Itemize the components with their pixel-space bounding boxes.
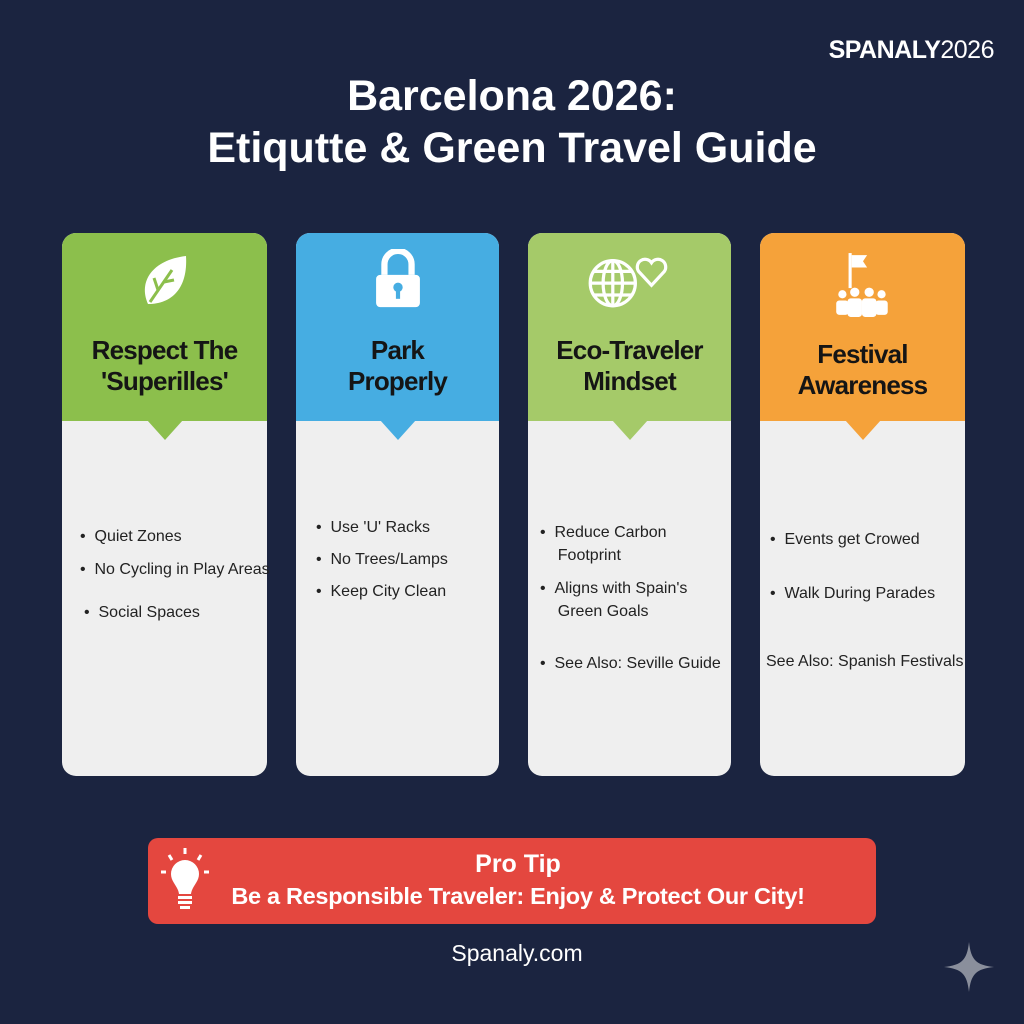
header text: Mindset	[583, 366, 676, 396]
footer: website: Spanaly.com	[451, 940, 583, 966]
icon: leaf	[144, 256, 186, 304]
panel: eco-traveler mindset: • Reduce Carbon	[540, 524, 667, 541]
icon: globe and heart	[588, 258, 668, 308]
header text: Respect The	[92, 335, 237, 365]
panel: eco-traveler mindset: • See Also: Seville Guide	[540, 655, 721, 672]
brand logo: SPANALY2026	[829, 36, 994, 64]
panel: festival awareness: • Walk During Parades	[770, 585, 935, 602]
callout text: Be a Responsible Traveler: Enjoy & Protect Our City!	[231, 883, 805, 909]
callout: pro tip	[148, 838, 876, 924]
panel: park properly	[296, 233, 499, 776]
icon: crowd with flag	[836, 253, 888, 317]
header text	[556, 335, 704, 396]
panel: park properly: • Use 'U' Racks	[316, 519, 430, 536]
icon: sparkle	[944, 942, 994, 992]
panel: park properly: • No Trees/Lamps	[316, 551, 448, 568]
panel: festival awareness: • Events get Crowed	[770, 531, 920, 548]
bullets	[80, 528, 270, 621]
panel: eco-traveler mindset: Green Goals	[558, 603, 648, 620]
callout text	[231, 850, 805, 909]
panel: eco-traveler mindset: • Aligns with Spain's	[540, 580, 687, 597]
panel: respect the superilles: • Social Spaces	[84, 604, 200, 621]
panel: eco-traveler mindset: Footprint	[558, 547, 621, 564]
title	[207, 72, 817, 172]
panel: park properly: • Keep City Clean	[316, 583, 446, 600]
bullets	[766, 531, 963, 670]
icon: light bulb	[161, 848, 209, 909]
panel: respect the superilles	[62, 233, 267, 776]
icon: padlock	[376, 249, 420, 308]
header text: Park	[371, 335, 424, 365]
header text	[92, 335, 238, 396]
header text: Awareness	[798, 370, 927, 400]
title: Etiqutte & Green Travel Guide	[207, 124, 817, 172]
panel: festival awareness: See Also: Spanish Festivals	[766, 653, 963, 670]
header text	[348, 335, 448, 396]
header text: Eco-Traveler	[556, 335, 703, 365]
bullets	[316, 519, 448, 600]
title: Barcelona 2026:	[347, 72, 677, 120]
header text: Properly	[348, 366, 447, 396]
header text	[798, 339, 927, 400]
header text: 'Superilles'	[101, 366, 228, 396]
panel: respect the superilles: • Quiet Zones	[80, 528, 182, 545]
panel: eco-traveler mindset	[528, 233, 731, 776]
panel: respect the superilles: • No Cycling in Play Areas	[80, 561, 270, 578]
callout text: Pro Tip	[475, 850, 561, 878]
header text: Festival	[817, 339, 908, 369]
bullets	[540, 524, 721, 672]
panel: festival awareness	[760, 233, 965, 776]
